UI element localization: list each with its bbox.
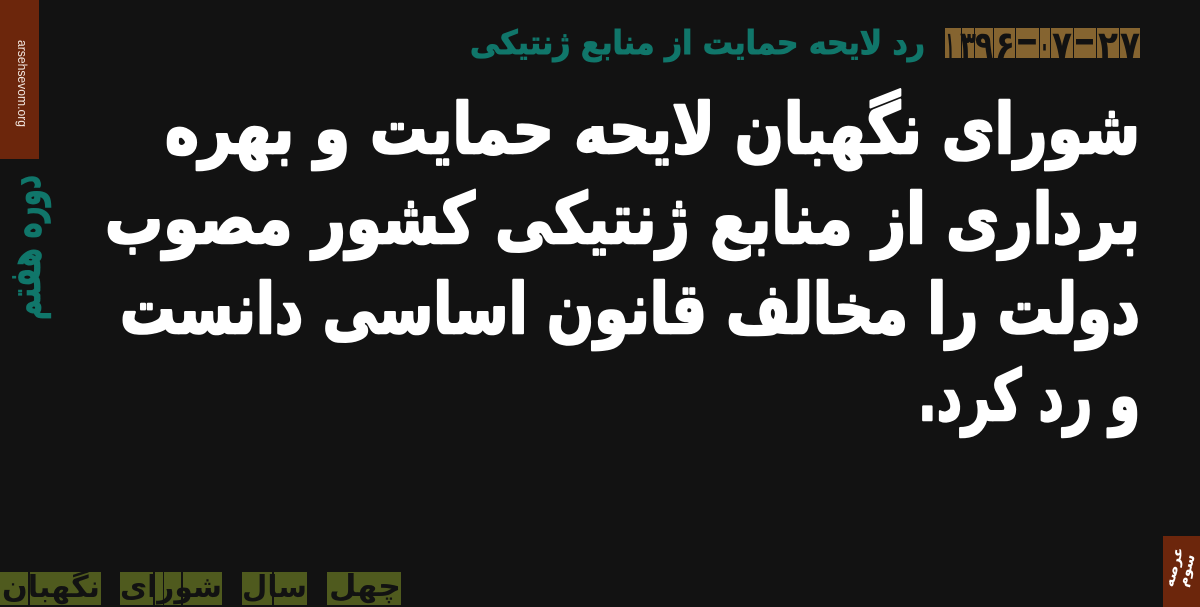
- main statement: [105, 88, 1140, 437]
- footer series title: نگهبان: [2, 569, 100, 605]
- footer series title: چهل: [329, 569, 401, 604]
- date digits: ۱: [946, 23, 954, 67]
- panel: website tab: [0, 0, 39, 159]
- logo calligraphy: سوم: [1175, 553, 1199, 588]
- date badge: [945, 18, 1140, 67]
- date digits: -: [1015, 18, 1039, 62]
- date digits: ۰: [1040, 23, 1049, 67]
- date digits: ۷: [1052, 23, 1072, 67]
- date digits: ۷: [1120, 23, 1140, 67]
- subtitle: رد لایحه حمایت از منابع ژنتیکی: [470, 23, 925, 63]
- date digits: ۲: [1098, 23, 1118, 67]
- logo calligraphy: عرصه: [1161, 546, 1187, 589]
- date digits: [946, 18, 1140, 67]
- date digits: ۶: [995, 23, 1015, 67]
- website address: arsehsevom.org: [15, 40, 29, 127]
- footer series title: سال: [242, 570, 307, 605]
- date digits: -: [1073, 18, 1096, 62]
- date digits: ۳: [960, 23, 976, 67]
- footer series title: شورای: [120, 570, 222, 605]
- vertical heading: seventh term: دوره هفتم: [0, 175, 51, 320]
- logo calligraphy: [1161, 546, 1200, 592]
- footer series title: [0, 569, 401, 605]
- date digits: ۹: [975, 23, 993, 67]
- logo badge: [1161, 536, 1200, 607]
